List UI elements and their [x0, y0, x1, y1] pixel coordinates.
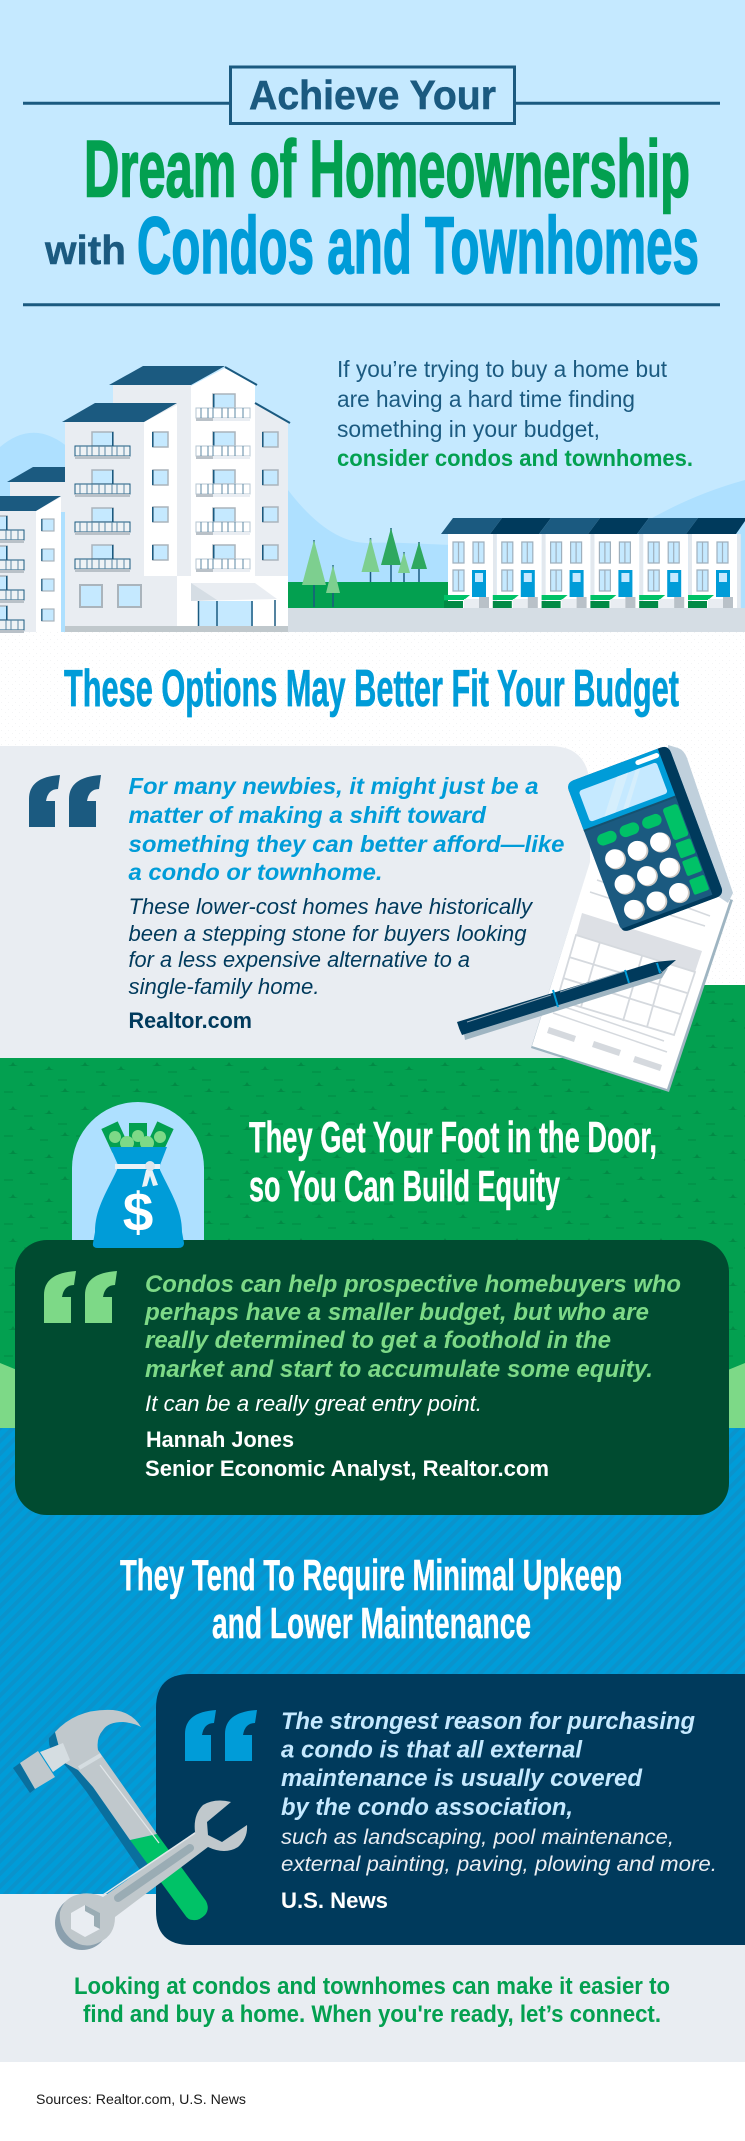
background hills	[0, 433, 745, 632]
quote emphasis: maintenance is usually covered	[281, 1765, 643, 1792]
tie	[115, 1164, 160, 1187]
title line: Achieve Your: Achieve Your	[249, 72, 496, 118]
quote source: U.S. News	[281, 1888, 388, 1913]
paper	[531, 862, 733, 1092]
trees	[302, 528, 427, 607]
icon: money bag in arch	[72, 1102, 204, 1248]
title bottom rule	[23, 303, 720, 306]
hammer	[13, 1710, 208, 1920]
heading: They Get Your Foot in the Door	[249, 1113, 657, 1211]
townhomes	[441, 518, 745, 608]
wrench	[55, 1801, 247, 1950]
title box	[230, 67, 514, 124]
arch	[72, 1102, 204, 1240]
quote emphasis: a condo or townhome.	[128, 859, 382, 885]
intro text: something in your budget,	[337, 416, 600, 442]
quote emphasis: something they can better afford—like	[128, 831, 565, 857]
quote emphasis: a condo is that all external	[281, 1736, 583, 1764]
quote emphasis: market and start to accumulate some equity.	[145, 1356, 653, 1383]
closing call to action: find and buy a home. When you're ready, let’s connect.	[83, 2001, 661, 2028]
quote mark	[185, 1710, 257, 1761]
quote body: been a stepping stone for buyers looking	[128, 921, 527, 946]
quote body	[281, 1826, 717, 1876]
section background: closing grey	[0, 1894, 745, 2062]
heading: They Tend To Require Minimal Upkeep: and Lower Maintenance	[212, 1599, 531, 1648]
quote emphasis: matter of making a shift toward	[128, 802, 487, 828]
intro text	[337, 356, 693, 471]
header title block	[23, 67, 720, 305]
quote body	[128, 894, 534, 999]
main apartment building	[62, 366, 290, 632]
quote source	[145, 1427, 549, 1481]
small building at left	[0, 467, 65, 633]
bills	[101, 1121, 174, 1153]
grass lawn	[288, 582, 453, 608]
panel: budget quote	[0, 746, 590, 1058]
calculator	[566, 745, 733, 933]
quote body: It can be a really great entry point.	[145, 1391, 482, 1416]
section background: sky	[0, 0, 745, 632]
quote emphasis: perhaps have a smaller budget, but who are	[144, 1299, 649, 1326]
closing call to action	[74, 1973, 670, 2028]
closing call to action: Looking at condos and townhomes can make it easier to	[74, 1973, 670, 2000]
quote body: These lower-cost homes have historically	[128, 894, 534, 919]
section background: white dotted	[0, 632, 745, 992]
quote source: Senior Economic Analyst, Realtor.com	[145, 1456, 549, 1481]
bag	[93, 1147, 184, 1248]
panel background	[0, 746, 590, 1058]
heading: They Get Your Foot in the Door: so You Can Build Equity	[249, 1162, 560, 1211]
quote emphasis: Condos can help prospective homebuyers who	[145, 1271, 681, 1298]
heading: They Tend To Require Minimal Upkeep	[120, 1551, 622, 1648]
quote source: Realtor.com	[128, 1008, 252, 1033]
quote emphasis: The strongest reason for purchasing	[281, 1708, 695, 1735]
title word: with: with	[44, 227, 126, 273]
icon: hammer and wrench	[13, 1710, 247, 1950]
section background: blue stripes	[0, 1428, 745, 1894]
quote emphasis: really determined to get a foothold in the	[145, 1327, 611, 1354]
quote body: such as landscaping, pool maintenance,	[281, 1826, 674, 1849]
intro text: If you’re trying to buy a home but	[337, 356, 668, 382]
section background: light green hills	[0, 1363, 745, 1428]
quote mark	[29, 775, 101, 827]
dollar sign: $	[123, 1181, 153, 1243]
road	[288, 608, 745, 632]
panel: equity quote	[15, 1240, 729, 1515]
quote body: external painting, paving, plowing and more.	[281, 1853, 717, 1876]
quote emphasis: by the condo association,	[281, 1794, 573, 1821]
pen	[457, 960, 676, 1040]
intro text: consider condos and townhomes.	[337, 445, 693, 471]
section background: green grass	[0, 985, 745, 1428]
intro text: are having a hard time finding	[337, 386, 635, 412]
quote body: single-family home.	[128, 974, 320, 999]
quote emphasis: For many newbies, it might just be a	[128, 773, 539, 799]
panel background	[15, 1240, 729, 1515]
quote emphasis	[128, 773, 565, 885]
illustration: neighbourhood scene	[0, 366, 745, 633]
quote mark	[44, 1271, 117, 1323]
quote body: for a less expensive alternative to a	[128, 947, 470, 972]
quote source: Hannah Jones	[146, 1427, 294, 1452]
illustration: paper, calculator and pen	[457, 745, 733, 1092]
quote emphasis	[144, 1271, 681, 1383]
title rule left and right	[23, 102, 720, 105]
panel: maintenance quote	[156, 1674, 745, 1945]
panel background	[156, 1674, 745, 1945]
sources line: Sources: Realtor.com, U.S. News	[36, 2091, 246, 2107]
quote emphasis	[281, 1708, 695, 1821]
